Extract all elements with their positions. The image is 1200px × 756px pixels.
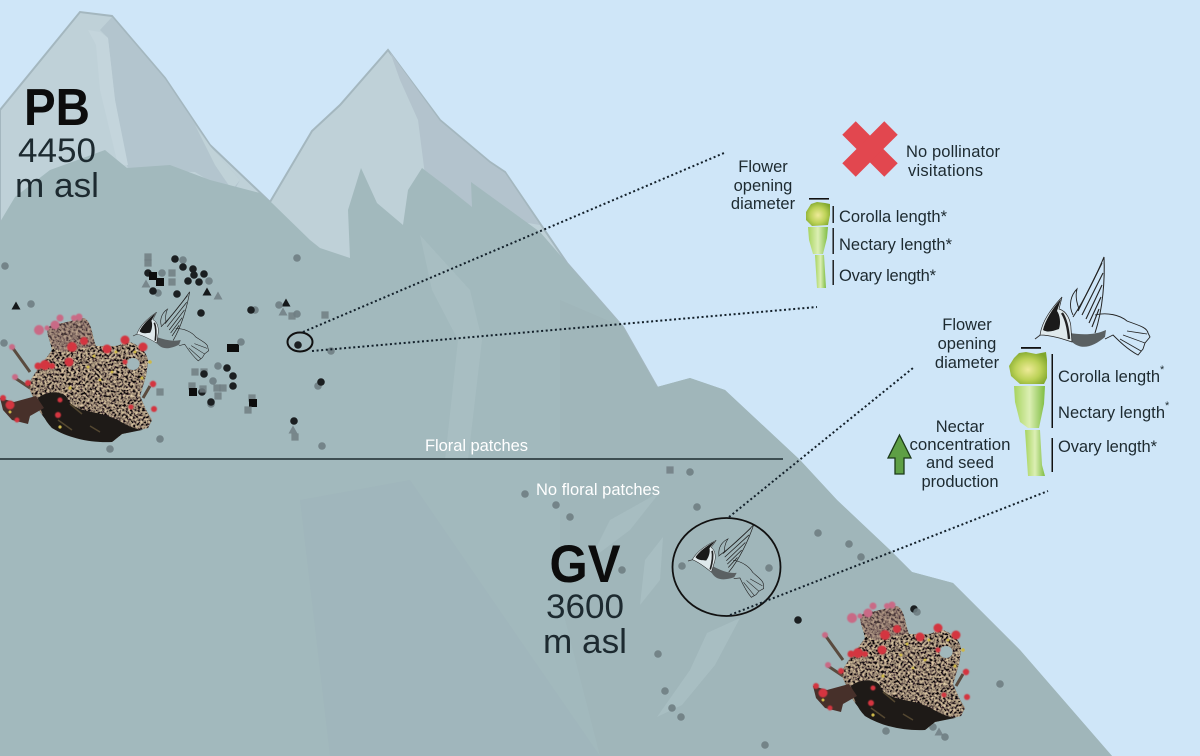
shrub with flowers: GV <box>813 602 970 730</box>
flower diagram: GV <box>1009 347 1053 476</box>
site label: GV <box>543 535 627 661</box>
flower labels: PB: Nectary length* <box>839 236 953 254</box>
dotted zoom lines <box>303 153 1048 615</box>
flower labels: GV: diameter <box>935 354 1000 372</box>
flower labels: PB: Ovary length* <box>839 267 937 285</box>
observation points: PB <box>0 253 335 453</box>
flower labels: GV: Corolla length <box>1058 368 1160 386</box>
zoom ellipse: PB <box>288 332 312 352</box>
flower labels: GV: Ovary length* <box>1058 438 1158 456</box>
hummingbird: PB <box>131 282 220 363</box>
flower labels: GV: opening <box>938 335 996 353</box>
floral patch boundary line: Floral patches <box>425 437 528 455</box>
flower labels: GV: and seed <box>926 454 994 472</box>
observation points: GV <box>521 466 1004 749</box>
flower labels: PB <box>731 158 953 285</box>
icon: red cross, no visitation <box>849 128 891 170</box>
site label: GV: m asl <box>543 623 627 661</box>
site label: PB: m asl <box>15 167 99 205</box>
hummingbird: pollinator visiting <box>1035 257 1150 355</box>
flower labels: GV: Flower <box>942 316 992 334</box>
site label: PB: 4450 <box>18 132 96 170</box>
flower labels: GV: Nectar <box>936 418 985 436</box>
flower labels: GV: * <box>1165 400 1170 412</box>
flower labels: GV: Nectary length <box>1058 404 1165 422</box>
flower labels: PB: Flower <box>738 158 788 176</box>
flower labels: PB: Corolla length* <box>839 208 948 226</box>
flower diagram: PB <box>806 198 834 288</box>
shrub with flowers: PB <box>0 314 157 442</box>
flower labels: PB: diameter <box>731 195 796 213</box>
flower labels: GV: * <box>1160 364 1165 376</box>
label: no floral patches: No floral patches <box>536 481 660 499</box>
zoom circle: GV <box>672 518 780 616</box>
site label: PB <box>15 79 99 205</box>
front mountain <box>0 150 1112 756</box>
icon: green up arrow <box>888 435 911 474</box>
back mountain peaks <box>0 12 657 500</box>
site label: GV: GV <box>550 535 620 594</box>
flower labels: PB: opening <box>734 177 792 195</box>
hummingbird: GV circle <box>684 507 784 600</box>
flower labels: GV: production <box>921 473 999 491</box>
flower labels: GV: concentration <box>910 436 1010 454</box>
site label: PB: PB <box>24 79 90 137</box>
site label: GV: 3600 <box>546 588 624 626</box>
flower labels: GV <box>910 316 1170 491</box>
label: no pollinator visitations <box>906 143 1000 180</box>
label: no pollinator visitations: No pollinator <box>906 143 1000 161</box>
label: no pollinator visitations: visitations <box>908 162 983 180</box>
